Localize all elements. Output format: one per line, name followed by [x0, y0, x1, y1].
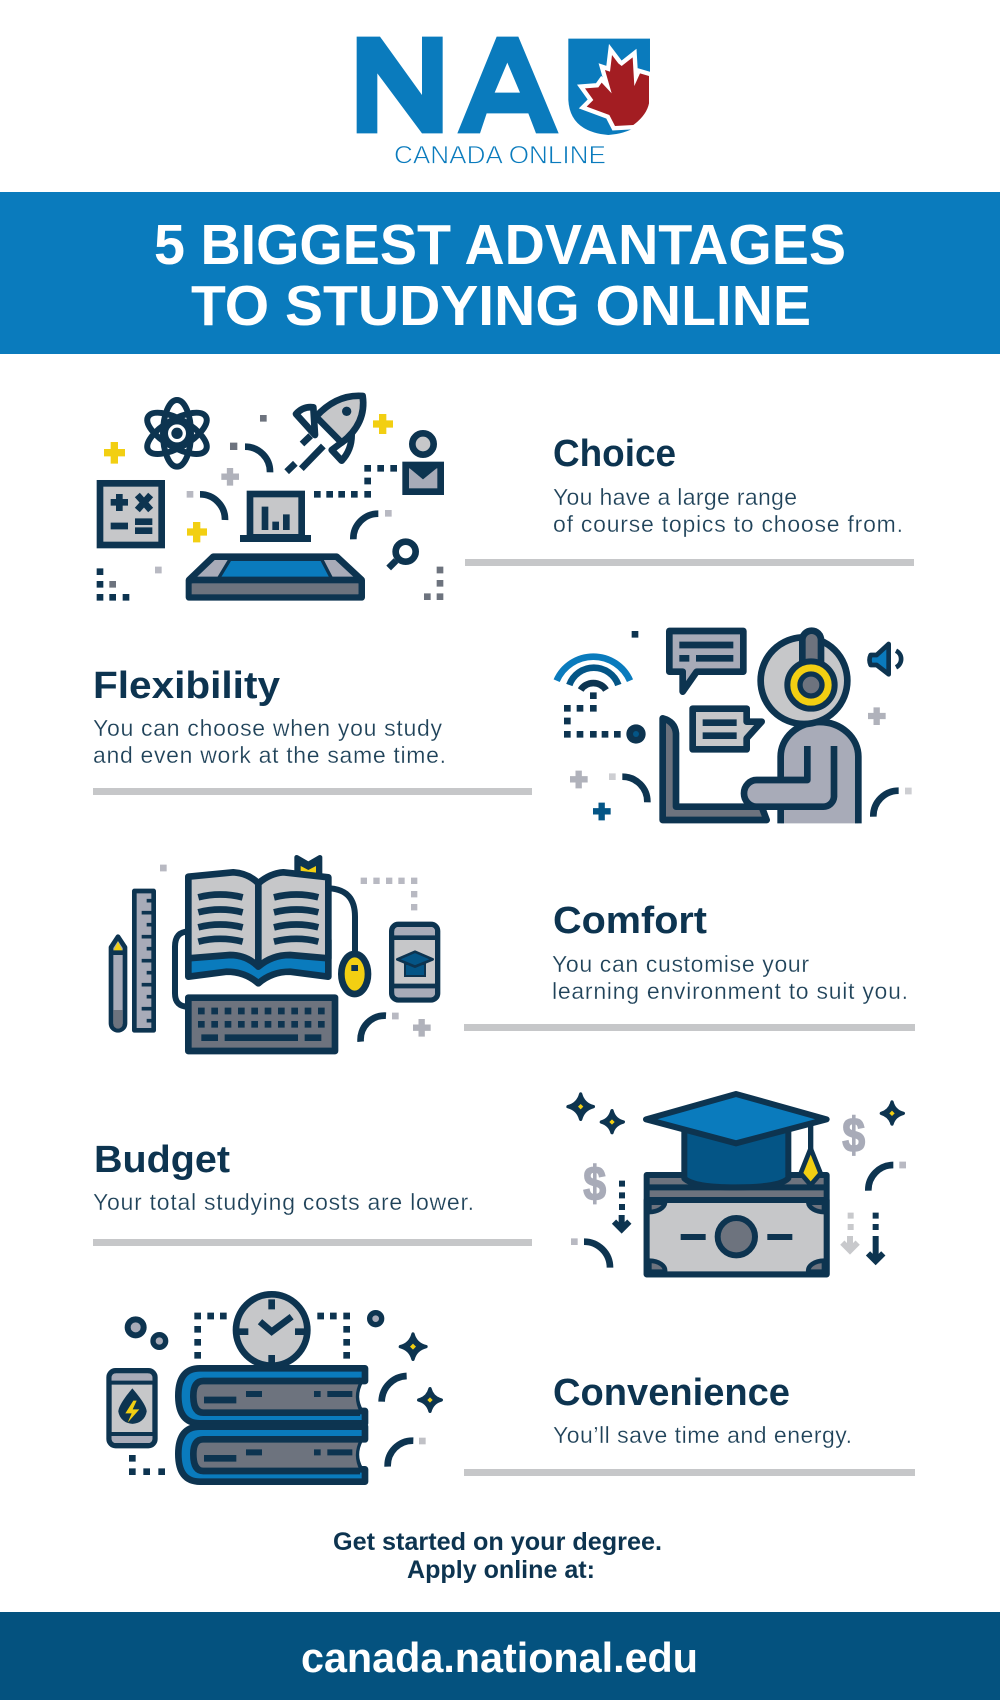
title: 5 BIGGEST ADVANTAGES	[154, 213, 846, 277]
light squares	[160, 865, 417, 1019]
icon: calculator	[100, 483, 162, 545]
decorative squares	[109, 415, 443, 600]
text block: Your total studying costs are lower.	[93, 1189, 474, 1215]
heading: Flexibility	[93, 665, 280, 707]
navy dots	[129, 1313, 350, 1475]
icon: top book	[178, 1368, 365, 1423]
heading: Convenience	[553, 1372, 790, 1414]
icon: tablet base	[189, 557, 362, 597]
icon: ruler	[134, 891, 154, 1030]
dollar signs: $	[583, 1157, 606, 1211]
icon: wifi	[557, 657, 630, 690]
icon: rocket	[287, 396, 363, 472]
title: TO STUDYING ONLINE	[191, 274, 811, 338]
icon: speaker	[869, 644, 901, 674]
icon: flexibility illustration	[557, 631, 912, 823]
icon: grey down arrow	[842, 1213, 858, 1250]
text block: learning environment to suit you.	[552, 978, 908, 1004]
footer banner	[0, 1612, 1000, 1700]
icon: budget illustration	[568, 1094, 906, 1274]
icon: speech bubble top	[669, 631, 743, 692]
icon: bottom book	[178, 1427, 365, 1482]
icon: convenience illustration	[109, 1294, 441, 1482]
text block: You have a large range	[553, 484, 797, 510]
network node	[626, 724, 646, 744]
plus mark	[413, 1019, 431, 1037]
icon: sparkles	[400, 1334, 441, 1411]
panel: comfort	[111, 857, 915, 1051]
logo subtitle: CANADA ONLINE	[394, 141, 606, 169]
heading: Budget	[94, 1139, 230, 1181]
icon: laptop side	[663, 718, 767, 820]
dollar signs: $	[842, 1109, 865, 1163]
icon: pencil	[111, 937, 125, 1030]
text block: You can choose when you study	[93, 715, 442, 741]
icon: choice illustration	[97, 396, 443, 601]
text block: of course topics to choose from.	[553, 511, 903, 537]
icon: magnifier	[389, 542, 416, 568]
icon: bubbles	[128, 1313, 382, 1347]
icon: graduation cap	[646, 1094, 827, 1187]
icon: phone with energy drop	[109, 1371, 155, 1446]
icon: arm	[744, 746, 834, 807]
icon: person body	[781, 722, 858, 823]
light squares	[571, 1162, 906, 1245]
heading: Choice	[553, 433, 676, 475]
dotted navy squares	[97, 465, 397, 601]
icon: bookmark	[297, 857, 320, 873]
icon: person	[406, 433, 441, 492]
icon: comfort illustration	[111, 857, 438, 1051]
icon: cables	[175, 888, 355, 1007]
call to action: Apply online at:	[407, 1556, 595, 1584]
text block: You can customise your	[552, 951, 809, 977]
light squares	[155, 491, 392, 573]
icon: atom	[141, 400, 213, 467]
logo: NAU Canada Online	[357, 37, 650, 169]
plus mark blue	[593, 803, 611, 820]
icon: laptop screen	[240, 494, 311, 542]
panel: flexibility	[93, 631, 912, 823]
icon: maple leaf	[585, 55, 649, 126]
arcs	[584, 1165, 893, 1268]
icon: speech bubble lower	[693, 709, 762, 749]
icon: clock	[236, 1294, 307, 1366]
arcs	[382, 1376, 413, 1467]
icon: plus marks	[104, 414, 393, 542]
title banner	[0, 192, 1000, 354]
icon: banknote	[647, 1175, 827, 1274]
icon: keyboard	[188, 998, 335, 1051]
text block: You’ll save time and energy.	[553, 1422, 852, 1448]
icon: mouse	[341, 954, 368, 994]
icon: phone with cap	[392, 924, 438, 1000]
call to action: Get started on your degree.	[333, 1528, 662, 1556]
light squares	[419, 1438, 426, 1444]
arc	[361, 1016, 386, 1042]
logo letters N A	[357, 37, 559, 133]
icon: navy down arrows	[614, 1181, 883, 1261]
text block: and even work at the same time.	[93, 742, 446, 768]
panel: budget	[93, 1094, 906, 1274]
arcs	[200, 447, 378, 539]
arcs	[622, 777, 899, 817]
website url: canada.national.edu	[301, 1634, 698, 1681]
panel: choice	[97, 396, 914, 601]
plus marks	[570, 707, 886, 788]
light squares	[609, 773, 912, 794]
heading: Comfort	[553, 900, 707, 942]
logo shield	[568, 39, 650, 135]
navy dots	[564, 631, 638, 738]
panel: convenience	[109, 1294, 915, 1482]
icon: head with headphones	[761, 631, 847, 724]
icon: sparkles	[568, 1094, 903, 1133]
icon: open book	[188, 872, 328, 983]
